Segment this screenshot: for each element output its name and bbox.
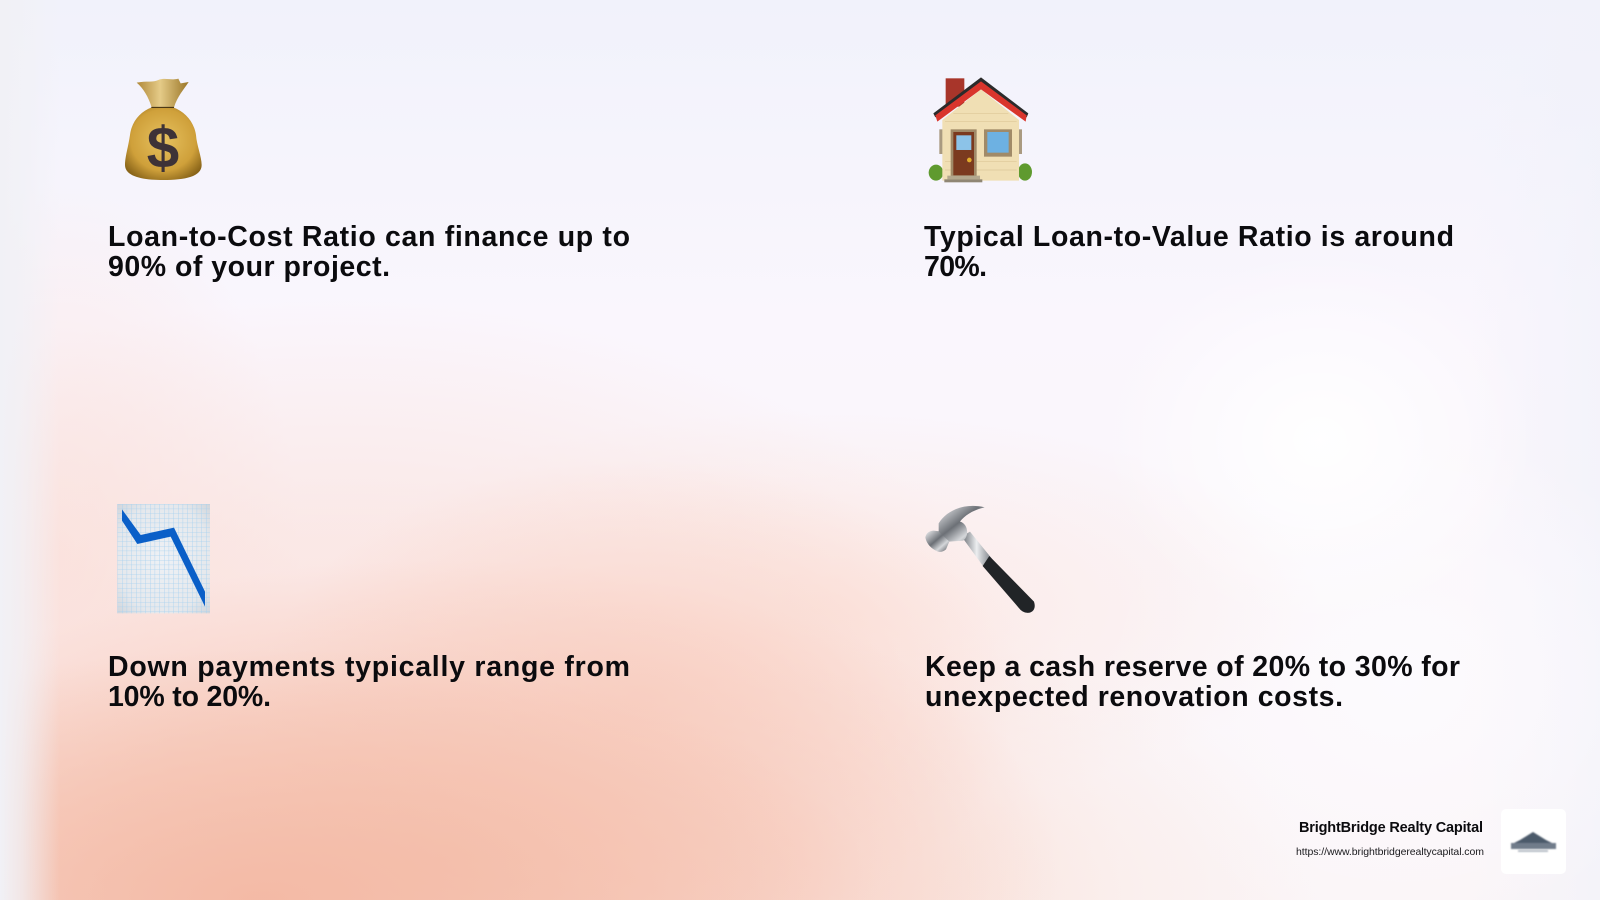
text: loan-to-cost: Loan-to-Cost Ratio can finance up to [108,221,630,253]
icon: chart decreasing [117,504,210,613]
text: down payments: Down payments typically range from [108,651,630,683]
icon: house [929,77,1032,182]
text: down payments: 10% to 20%. [108,681,271,713]
icon: hammer [925,506,1035,613]
panel: loan-to-cost [108,79,630,283]
text: loan-to-cost: 90% of your project. [108,251,390,283]
text: cash reserve: Keep a cash reserve of 20% to 30% for [925,651,1460,683]
panel: down payments [108,504,630,713]
icon: money bag: $ [147,116,179,181]
brand name: BrightBridge Realty Capital [1299,820,1483,836]
footer: brand [1296,809,1566,874]
text: loan-to-value: Typical Loan-to-Value Ratio is around [924,221,1454,253]
text: cash reserve: unexpected renovation costs. [925,681,1343,713]
text: loan-to-value: 70%. [924,251,987,283]
brand url: https://www.brightbridgerealtycapital.com [1296,846,1484,858]
logo card [1501,809,1566,874]
panel: cash reserve [925,506,1460,713]
panel: loan-to-value [924,77,1454,283]
icon: money bag [125,79,202,181]
